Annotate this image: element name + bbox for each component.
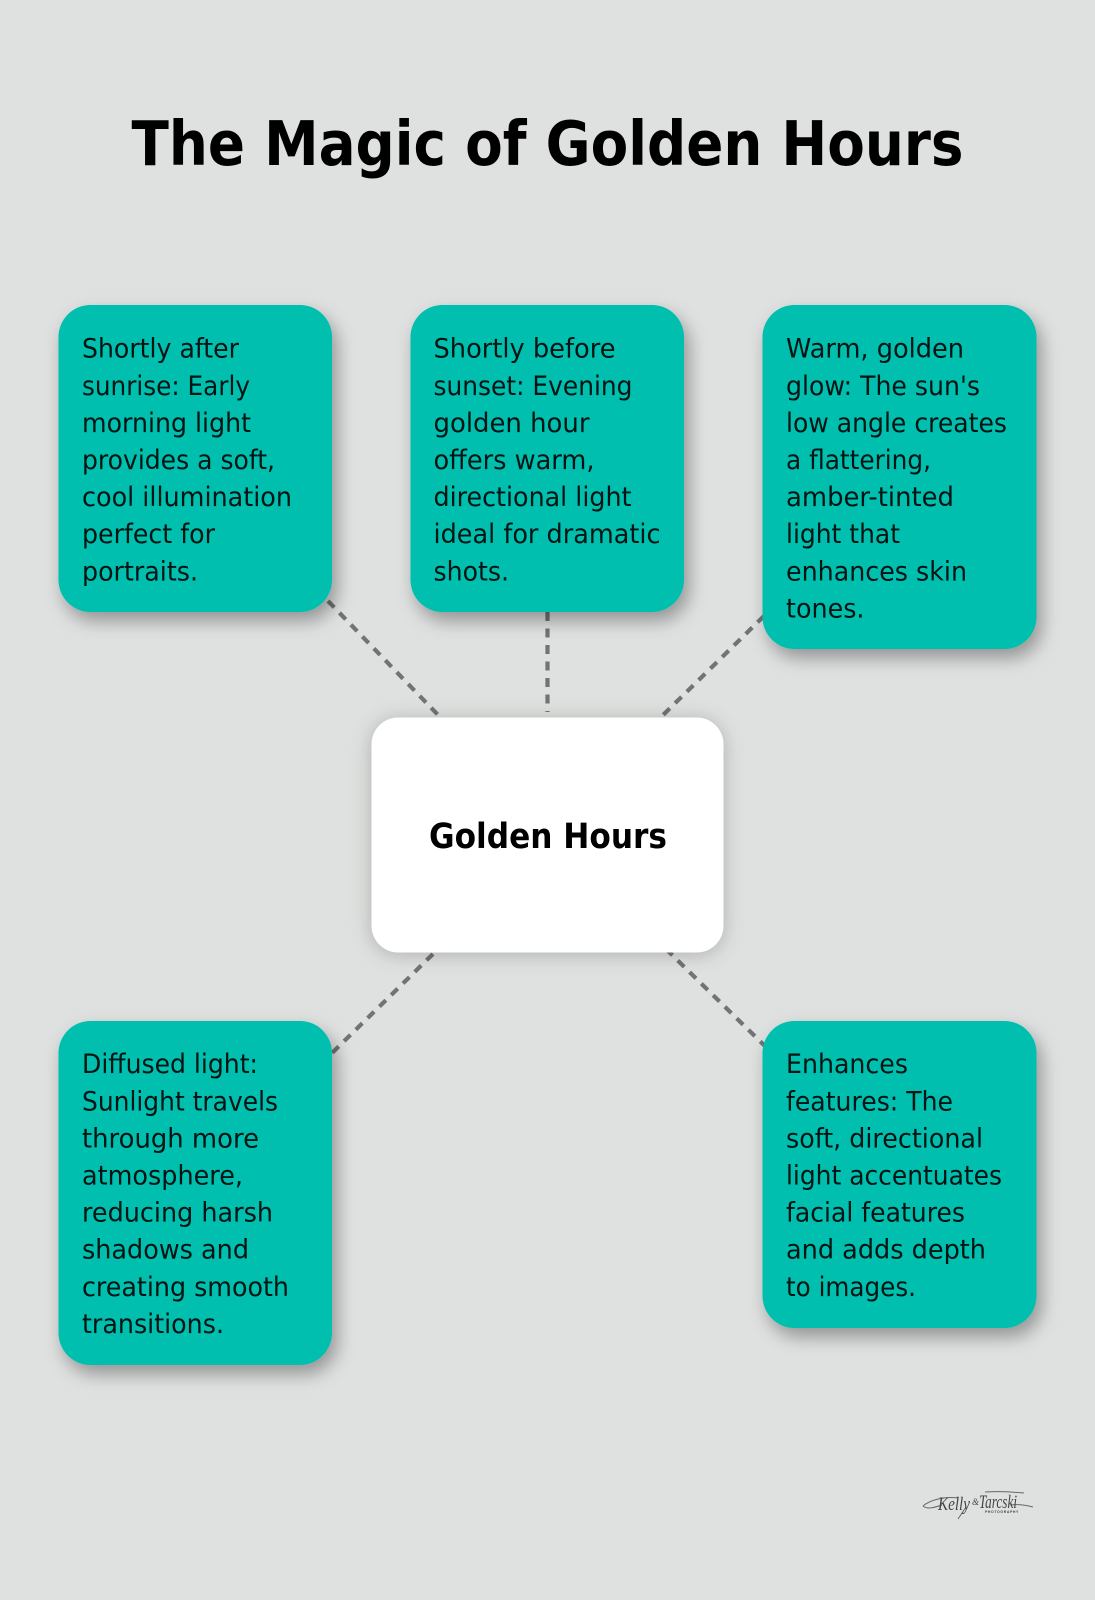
panel: shortly after sunrise: cool illumination [82, 482, 292, 513]
panel: centre node golden hours [372, 718, 724, 952]
panel: enhances features: soft, directional [786, 1123, 983, 1154]
panel: shortly before sunset: ideal for dramatic [434, 519, 660, 550]
panel: enhances features: facial features [786, 1198, 965, 1229]
panel: diffused light [58, 1021, 332, 1365]
panel: enhances features: and adds depth [786, 1235, 986, 1266]
panel: diffused light: creating smooth [82, 1272, 289, 1303]
logo: photographer signature: PHOTOGRAPHY [985, 1510, 1019, 1514]
logo: photographer signature: & [972, 1497, 979, 1507]
panel: shortly before sunset: offers warm, [434, 445, 594, 476]
panel: warm golden glow: enhances skin [786, 556, 967, 587]
logo: photographer signature: Tarcski [979, 1492, 1017, 1513]
panel: warm golden glow: tones. [786, 593, 864, 624]
panel: shortly before sunset: directional light [434, 482, 632, 513]
panel: shortly before sunset: golden hour [434, 408, 590, 439]
panel: warm golden glow: Warm, golden [786, 334, 964, 365]
panel: shortly after sunrise [58, 305, 332, 612]
panel: shortly after sunrise: Shortly after [82, 334, 239, 365]
panel: shortly after sunrise: morning light [82, 408, 251, 439]
connector: sunset card to centre [545, 612, 550, 712]
connector: warm glow card to centre [660, 616, 764, 718]
panel: warm golden glow: glow: The sun's [786, 371, 980, 402]
panel: shortly after sunrise: perfect for [82, 519, 215, 550]
panel: diffused light: Diffused light: [82, 1049, 258, 1080]
panel: enhances features: Enhances [786, 1049, 908, 1080]
logo: photographer signature [923, 1492, 1033, 1519]
panel: warm golden glow: a flattering, [786, 445, 931, 476]
panel: diffused light: transitions. [82, 1309, 224, 1340]
panel: shortly after sunrise: sunrise: Early [82, 371, 250, 402]
panel: warm golden glow [762, 305, 1036, 649]
panel: enhances features: light accentuates [786, 1161, 1002, 1192]
panel: enhances features: features: The [786, 1086, 953, 1117]
panel: shortly before sunset: Shortly before [434, 334, 616, 365]
panel: diffused light: through more [82, 1123, 259, 1154]
panel: shortly before sunset: shots. [434, 556, 509, 587]
connector: sunrise card to centre [328, 601, 442, 719]
panel: diffused light: atmosphere, [82, 1161, 243, 1192]
connector: diffused light card to centre [332, 954, 433, 1053]
panel: diffused light: shadows and [82, 1235, 249, 1266]
panel: enhances features: to images. [786, 1272, 916, 1303]
panel: diffused light: Sunlight travels [82, 1086, 278, 1117]
logo: photographer signature: Kelly [937, 1494, 970, 1515]
panel: warm golden glow: amber-tinted [786, 482, 954, 513]
panel: shortly before sunset: sunset: Evening [434, 371, 632, 402]
panel: warm golden glow: low angle creates [786, 408, 1007, 439]
panel: shortly after sunrise: portraits. [82, 556, 198, 587]
panel: enhances features [762, 1021, 1036, 1328]
panel: shortly before sunset [410, 305, 684, 612]
panel: warm golden glow: light that [786, 519, 900, 550]
panel: shortly after sunrise: provides a soft, [82, 445, 275, 476]
connector: enhances features card to centre [666, 949, 770, 1051]
title: The Magic of Golden Hours [132, 108, 964, 180]
panel: diffused light: reducing harsh [82, 1198, 273, 1229]
panel: centre node golden hours: Golden Hours [429, 817, 667, 857]
